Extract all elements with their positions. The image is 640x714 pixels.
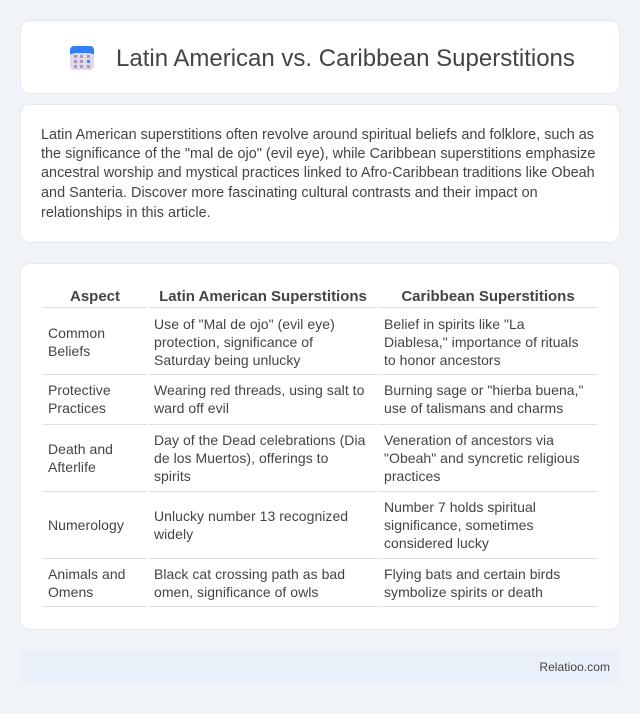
row: protective practices bbox=[48, 382, 584, 416]
row: common beliefs: Use of "Mal de ojo" (evil eye) bbox=[154, 316, 335, 332]
row: death and afterlife: spirits bbox=[154, 468, 191, 484]
row: death and afterlife: Day of the Dead celebrations (Dia bbox=[154, 432, 365, 448]
row: common beliefs: protection, significance of bbox=[154, 334, 313, 350]
footer bar bbox=[20, 650, 620, 684]
row: death and afterlife: Afterlife bbox=[48, 459, 96, 475]
row: protective practices: Practices bbox=[48, 400, 106, 416]
row: animals and omens: Omens bbox=[48, 584, 93, 600]
row: common beliefs: Belief in spirits like "La bbox=[384, 316, 525, 332]
row: animals and omens: Flying bats and certain birds bbox=[384, 566, 560, 582]
row: death and afterlife: "Obeah" and syncretic religious bbox=[384, 450, 580, 466]
panel: title card bbox=[20, 20, 620, 94]
row: death and afterlife: practices bbox=[384, 468, 440, 484]
intro text: and Santeria. Discover more fascinating cultural contrasts and their impact on bbox=[41, 185, 538, 201]
row: death and afterlife: de los Muertos), offerings to bbox=[154, 450, 328, 466]
table header: Latin American Superstitions bbox=[159, 288, 367, 305]
icon: calendar bbox=[70, 46, 94, 70]
row: death and afterlife: Death and bbox=[48, 441, 113, 457]
row: protective practices: Wearing red threads, using salt to bbox=[154, 382, 364, 398]
row: common beliefs: to honor ancestors bbox=[384, 352, 501, 368]
footer text: Relatioo.com bbox=[539, 660, 610, 674]
row: numerology: Unlucky number 13 recognized bbox=[154, 508, 348, 524]
row: animals and omens: Animals and bbox=[48, 566, 125, 582]
row: protective practices: use of talismans and charms bbox=[384, 400, 563, 416]
row: animals and omens bbox=[48, 566, 560, 600]
row: death and afterlife bbox=[48, 432, 580, 484]
intro text: ancestral worship and mystical practices linked to Afro-Caribbean traditions like Obeah bbox=[41, 165, 595, 181]
intro text: the significance of the "mal de ojo" (evil eye), while Caribbean superstitions emphasize bbox=[41, 146, 595, 162]
panel: comparison table bbox=[20, 263, 620, 630]
row: common beliefs: Beliefs bbox=[48, 343, 90, 359]
row: common beliefs: Saturday being unlucky bbox=[154, 352, 300, 368]
row: protective practices: Protective bbox=[48, 382, 111, 398]
row: animals and omens: Black cat crossing path as bad bbox=[154, 566, 345, 582]
row: animals and omens: symbolize spirits or death bbox=[384, 584, 543, 600]
row: common beliefs: Common bbox=[48, 325, 105, 341]
panel: introduction bbox=[20, 104, 620, 243]
intro text: relationships in this article. bbox=[41, 205, 211, 221]
row: numerology: widely bbox=[154, 526, 193, 542]
row: numerology: Number 7 holds spiritual bbox=[384, 499, 536, 515]
title: Latin American vs. Caribbean Superstitions bbox=[116, 45, 575, 72]
row: protective practices: Burning sage or "hierba buena," bbox=[384, 382, 584, 398]
table header: Caribbean Superstitions bbox=[401, 288, 575, 305]
row: death and afterlife: Veneration of ancestors via bbox=[384, 432, 554, 448]
row: numerology: significance, sometimes bbox=[384, 517, 534, 533]
table header bbox=[70, 288, 575, 305]
row: numerology bbox=[48, 499, 536, 551]
intro text bbox=[41, 127, 595, 221]
intro text: Latin American superstitions often revolve around spiritual beliefs and folklore, such as bbox=[41, 127, 594, 143]
row: protective practices: ward off evil bbox=[154, 400, 229, 416]
row: common beliefs: Diablesa," importance of rituals bbox=[384, 334, 579, 350]
row: animals and omens: omen, significance of owls bbox=[154, 584, 318, 600]
table header: Aspect bbox=[70, 288, 120, 305]
row: numerology: Numerology bbox=[48, 517, 124, 533]
row: common beliefs bbox=[48, 316, 579, 368]
row: numerology: considered lucky bbox=[384, 535, 489, 551]
